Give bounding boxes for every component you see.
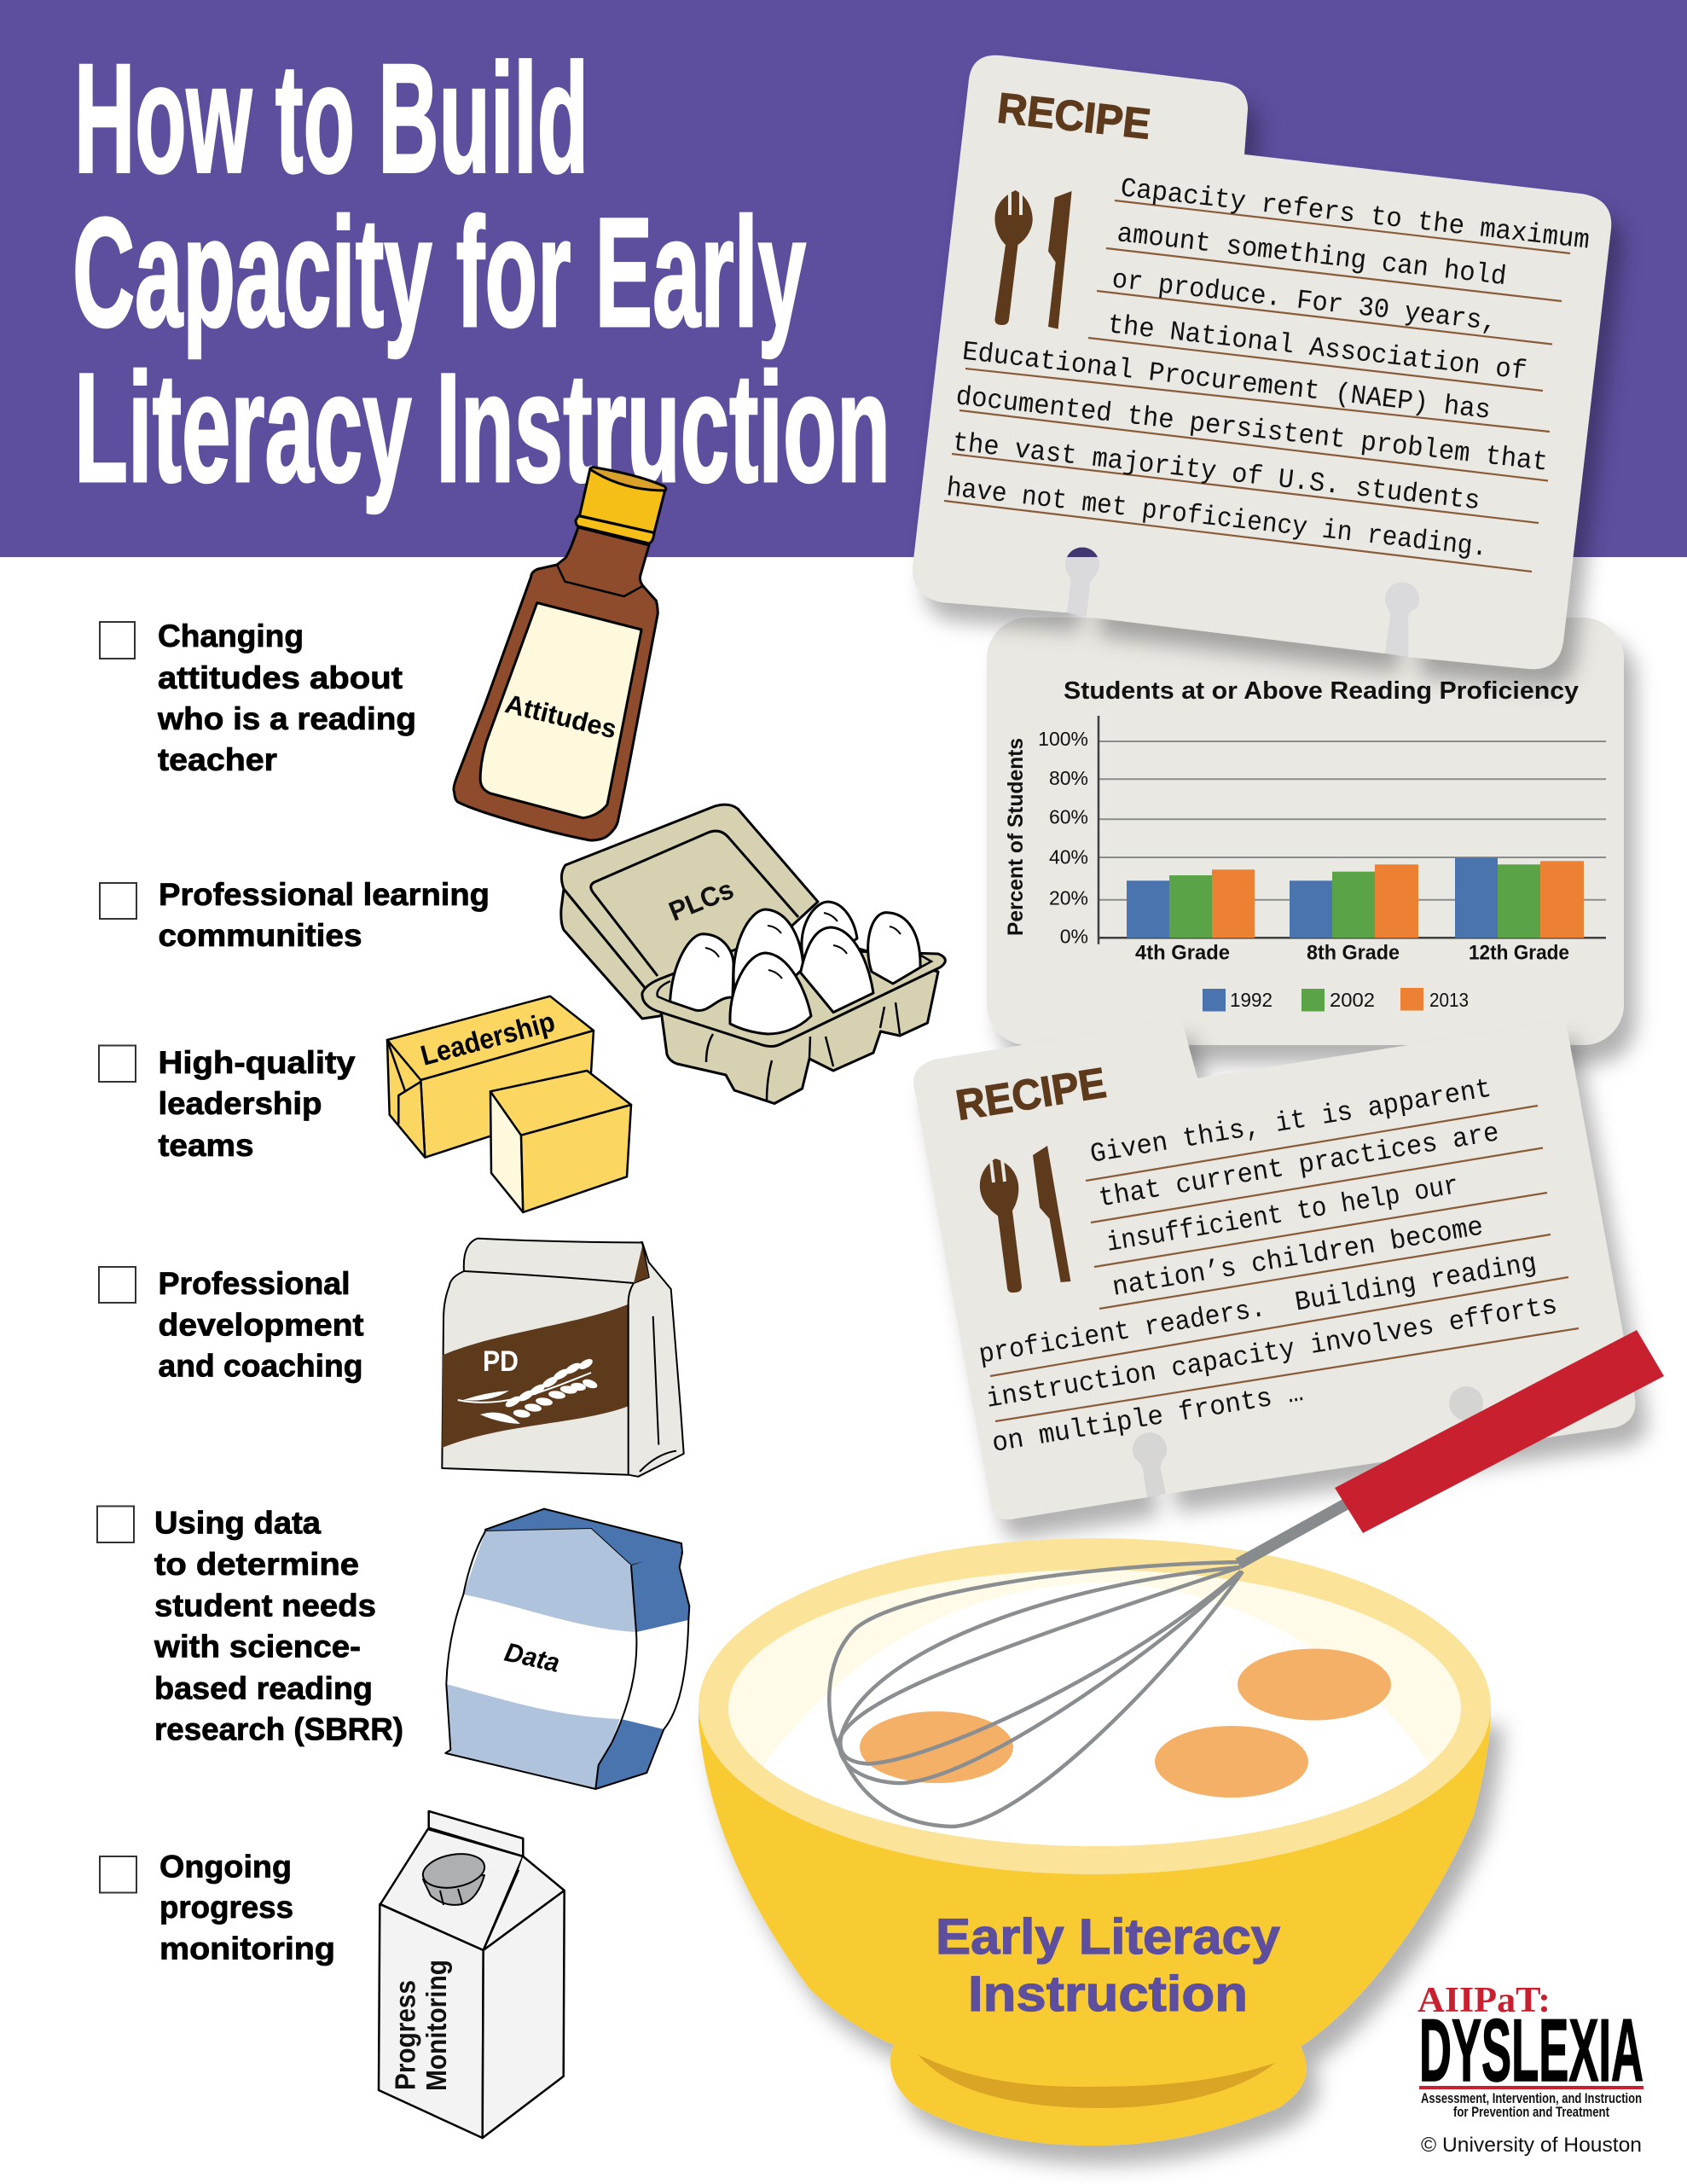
item: data: to determine — [154, 1547, 359, 1582]
icon: wheat — [458, 1357, 599, 1424]
bar chart: 20% — [1049, 887, 1088, 909]
item: data — [97, 1505, 403, 1747]
chart legend: 1992 — [1230, 989, 1272, 1011]
title: Capacity for Early — [72, 185, 806, 359]
bottle label: Attitudes — [502, 688, 619, 744]
title — [72, 31, 890, 514]
bar chart: 4th Grade — [1135, 941, 1230, 964]
item: attitudes: Changing — [158, 619, 304, 653]
carton label: Progress — [390, 1980, 421, 2090]
item: monitoring: monitoring — [159, 1931, 335, 1966]
egg yolks — [860, 1648, 1391, 1798]
recipe text lines: proficient readers. Building reading — [977, 1247, 1539, 1371]
item: pd: development — [159, 1307, 363, 1343]
logo: AIIPaT: — [1417, 1981, 1551, 2020]
item: leadership: teams — [159, 1128, 254, 1163]
whisk handle — [1335, 1330, 1664, 1533]
item: data: research (SBRR) — [154, 1711, 403, 1747]
item: plcs — [100, 877, 490, 953]
chart legend: 2013 — [1429, 989, 1469, 1011]
item: attitudes: teacher — [158, 742, 277, 777]
panel: recipe card 1 — [913, 55, 1611, 669]
icon: syrup bottle — [454, 468, 666, 840]
logo: for Prevention and Treatment — [1453, 2104, 1609, 2120]
recipe text lines: Educational Procurement (NAEP) has — [960, 336, 1493, 427]
recipe text lines: that current practices are — [1097, 1117, 1501, 1214]
item: data: based reading — [154, 1670, 373, 1706]
icon: whisk — [829, 1330, 1664, 1827]
icon: flour bag — [442, 1239, 684, 1477]
carton label — [390, 1960, 452, 2091]
chart title: Students at or Above Reading Proficiency — [1064, 677, 1579, 705]
icon: fork and knife — [980, 1146, 1070, 1292]
recipe text lines: amount something can hold — [1116, 218, 1508, 293]
logo — [1417, 1981, 1644, 2157]
heading: recipe: RECIPE — [953, 1059, 1110, 1130]
icon: butter — [387, 996, 631, 1212]
icon: egg carton — [561, 804, 945, 1104]
checklist — [97, 619, 490, 1966]
recipe text lines: Given this, it is apparent — [1088, 1073, 1493, 1170]
bowl label: Instruction — [968, 1966, 1248, 2022]
item: monitoring — [100, 1850, 335, 1966]
bar chart: 12th Grade — [1469, 941, 1569, 964]
butter label: Leadership — [417, 1005, 558, 1072]
icon: milk carton — [379, 1811, 565, 2138]
recipe text lines: or produce. For 30 years, — [1110, 264, 1499, 339]
bag label: Data — [501, 1637, 563, 1678]
item: attitudes: attitudes about — [158, 660, 403, 695]
item: plcs: Professional learning — [159, 877, 490, 912]
recipe text lines: documented the persistent problem that — [954, 380, 1550, 479]
recipe text lines: nation’s children become — [1110, 1211, 1486, 1304]
recipe text lines: have not met proficiency in reading. — [945, 472, 1489, 564]
icon: data bag — [445, 1509, 689, 1789]
item: monitoring: Ongoing — [159, 1850, 292, 1884]
item: data: student needs — [154, 1589, 376, 1623]
item: pd — [99, 1266, 363, 1384]
header band — [0, 0, 1687, 557]
item: leadership: leadership — [159, 1086, 322, 1121]
bag label: PD — [483, 1345, 519, 1378]
item: pd: Professional — [159, 1266, 350, 1301]
eggs — [670, 902, 920, 1034]
recipe text lines: instruction capacity involves efforts — [984, 1290, 1560, 1415]
bar chart — [1004, 716, 1606, 964]
recipe text lines: insufficient to help our — [1104, 1170, 1461, 1259]
item: pd: and coaching — [159, 1348, 363, 1384]
title: How to Build — [74, 31, 588, 205]
item: leadership — [99, 1045, 356, 1163]
heading: recipe: RECIPE — [995, 84, 1153, 148]
logo: © University of Houston — [1421, 2134, 1642, 2157]
carton label: PLCs — [664, 874, 738, 926]
bar chart: 0% — [1060, 926, 1088, 948]
recipe text lines: the National Association of — [1106, 309, 1528, 387]
carton cap — [420, 1850, 487, 1905]
recipe text lines: the vast majority of U.S. students — [951, 427, 1481, 517]
bar chart: 8th Grade — [1307, 941, 1400, 964]
bar chart: Percent of Students — [1004, 738, 1028, 936]
item: attitudes: who is a reading — [157, 701, 416, 736]
recipe text lines — [977, 1073, 1579, 1460]
bowl label — [936, 1909, 1280, 2022]
item: leadership: High-quality — [159, 1045, 356, 1080]
item: data: Using data — [154, 1505, 321, 1541]
carton label: Monitoring — [420, 1960, 452, 2091]
bar chart: 60% — [1049, 806, 1088, 828]
panel: bar chart card — [987, 618, 1624, 1045]
recipe text lines: on multiple fronts … — [990, 1377, 1306, 1460]
item: monitoring: progress — [159, 1890, 293, 1925]
chart legend — [1203, 988, 1469, 1012]
panel: recipe card 2 — [913, 1019, 1635, 1519]
bar chart: 40% — [1049, 845, 1088, 868]
bar chart: 100% — [1038, 728, 1088, 750]
icon: mixing bowl — [699, 1538, 1491, 2146]
item: attitudes — [100, 619, 416, 777]
item: plcs: communities — [159, 918, 362, 953]
icon: fork and knife — [994, 190, 1072, 329]
title: Literacy Instruction — [74, 340, 890, 514]
recipe text lines — [944, 172, 1591, 572]
bar chart: 80% — [1049, 767, 1088, 789]
item: data: with science- — [154, 1629, 361, 1664]
chart legend: 2002 — [1330, 989, 1375, 1011]
bowl label: Early Literacy — [936, 1909, 1280, 1965]
recipe text lines: Capacity refers to the maximum — [1119, 172, 1591, 257]
